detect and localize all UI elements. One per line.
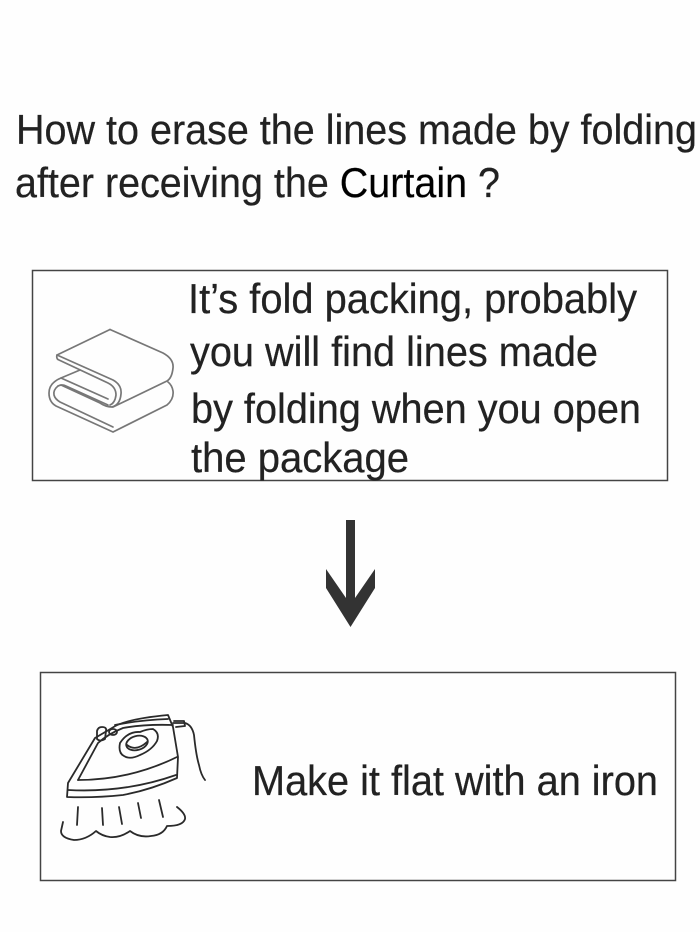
title: after receiving the Curtain ? (15, 159, 500, 206)
arrow: down (326, 520, 375, 627)
icon: steam iron (61, 715, 205, 840)
panel text: It’s fold packing, probably (188, 275, 637, 322)
panel: fold packing (32, 270, 668, 481)
panel border (40, 672, 676, 880)
panel: iron (40, 672, 676, 880)
panel text: you will find lines made (190, 328, 598, 375)
panel text: Make it flat with an iron (252, 757, 658, 804)
panel text (188, 275, 641, 481)
panel border (32, 270, 668, 480)
panel text: by folding when you open (191, 385, 641, 432)
title (15, 106, 697, 206)
panel text: the package (191, 434, 409, 481)
icon: folded fabric (49, 330, 173, 432)
